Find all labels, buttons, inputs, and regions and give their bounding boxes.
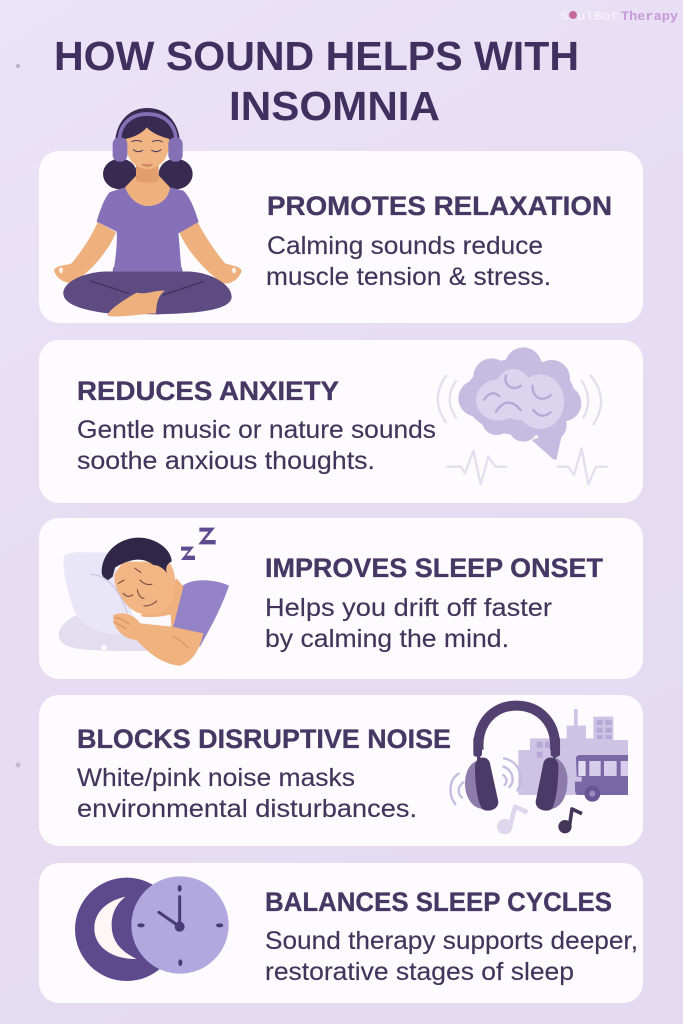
icon: headphones with city and bus xyxy=(450,706,628,834)
title: HOW SOUND HELPS WITH xyxy=(54,33,579,79)
sound waves xyxy=(450,758,521,804)
body text: soothe anxious thoughts. xyxy=(77,447,375,475)
panel: balances sleep cycles xyxy=(39,863,643,1003)
body text: restorative stages of sleep xyxy=(265,958,574,986)
headphones xyxy=(479,706,555,750)
icon: meditating person with headphones xyxy=(54,108,242,316)
body text xyxy=(266,232,551,291)
music notes xyxy=(497,807,582,834)
watermark: Therapy xyxy=(621,9,678,24)
watermark xyxy=(560,9,678,24)
body text: Gentle music or nature sounds xyxy=(77,416,436,444)
body text: by calming the mind. xyxy=(265,625,509,653)
body text xyxy=(265,594,552,653)
body text: environmental disturbances. xyxy=(77,795,417,823)
heading: IMPROVES SLEEP ONSET xyxy=(265,553,603,583)
title xyxy=(54,33,579,129)
body text: Calming sounds reduce xyxy=(267,232,543,260)
heading: PROMOTES RELAXATION xyxy=(267,191,612,221)
body text: White/pink noise masks xyxy=(77,764,355,792)
body text: Helps you drift off faster xyxy=(265,594,552,622)
panel: improves sleep onset xyxy=(39,518,643,679)
icon: brain with sound waves xyxy=(438,347,607,484)
bus xyxy=(575,755,628,802)
body text xyxy=(77,416,436,475)
body text: muscle tension & stress. xyxy=(266,263,551,291)
panel: reduces anxiety xyxy=(39,340,643,503)
icon: moon and clock xyxy=(75,876,229,981)
heading: BLOCKS DISRUPTIVE NOISE xyxy=(77,724,451,754)
body text xyxy=(265,927,638,986)
title: INSOMNIA xyxy=(229,83,440,129)
icon: sleeping person xyxy=(59,528,229,666)
heading: BALANCES SLEEP CYCLES xyxy=(265,887,612,917)
city skyline xyxy=(518,709,628,795)
panel: promotes relaxation xyxy=(39,108,643,323)
body text xyxy=(77,764,417,823)
heading: REDUCES ANXIETY xyxy=(77,376,339,406)
watermark: SoulBot xyxy=(560,9,619,24)
panel: blocks disruptive noise xyxy=(39,695,643,846)
body text: Sound therapy supports deeper, xyxy=(265,927,638,955)
